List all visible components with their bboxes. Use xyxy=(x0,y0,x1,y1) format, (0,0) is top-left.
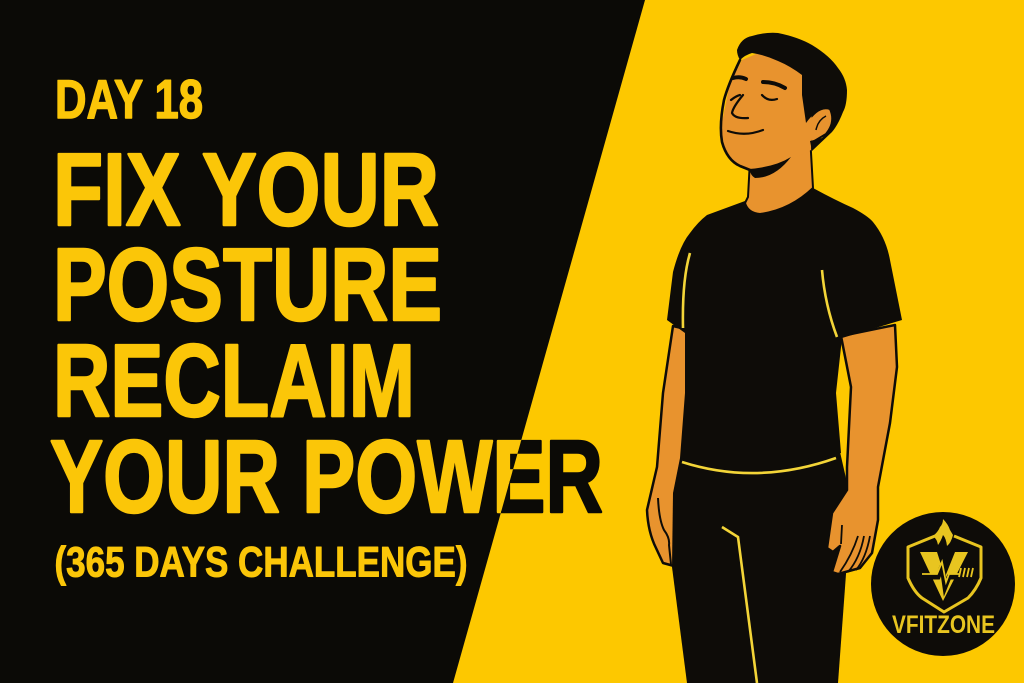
right arm xyxy=(827,325,897,574)
face outline xyxy=(721,60,750,170)
pulse line xyxy=(922,562,960,582)
ear inner xyxy=(816,116,826,130)
challenge subtitle: (365 DAYS CHALLENGE) xyxy=(54,538,468,586)
face fill xyxy=(721,48,812,170)
V mark xyxy=(920,552,968,601)
left arm xyxy=(647,326,690,566)
barbell xyxy=(959,568,973,577)
logo: VFITZONE badge xyxy=(871,512,1015,656)
headline line 2: POSTURE xyxy=(53,227,442,342)
shield outline xyxy=(908,536,981,612)
background: black diagonal panel xyxy=(0,0,645,683)
headline line 4 black overlap on yellow: YOUR POWER xyxy=(50,419,603,534)
pants xyxy=(672,452,848,683)
illustration: standing man xyxy=(647,33,902,683)
eyes, nose and mouth xyxy=(728,95,777,134)
pulse band xyxy=(921,566,966,587)
headline line 3: RECLAIM xyxy=(53,323,415,438)
logo wordmark: VFITZONE xyxy=(892,611,995,639)
t-shirt xyxy=(667,188,902,463)
ear xyxy=(806,108,832,143)
left hand fold lines xyxy=(658,498,671,564)
neck xyxy=(745,135,813,214)
logo circle xyxy=(871,512,1015,656)
shirt sleeve, hem and pants seams xyxy=(682,253,837,683)
flame xyxy=(933,519,953,546)
day label: DAY 18 xyxy=(55,68,203,130)
chin shadow xyxy=(749,157,791,178)
headline line 1: FIX YOUR xyxy=(53,132,439,247)
headline line 4: YOUR POWER xyxy=(50,419,603,534)
right hand thumb and finger lines xyxy=(840,525,870,572)
eyebrows xyxy=(733,77,785,88)
hair xyxy=(737,33,847,151)
text block: headline xyxy=(50,68,603,586)
